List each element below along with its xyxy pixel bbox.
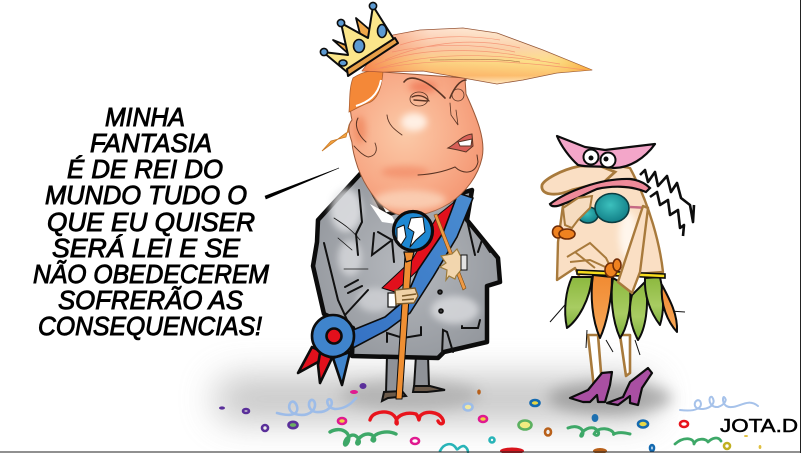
royal sash [353, 193, 473, 348]
speech line [265, 168, 339, 199]
crown [320, 2, 398, 76]
body [557, 165, 663, 280]
big nose [542, 166, 615, 194]
confetti: green streamer right [675, 438, 721, 444]
signature: JOTA.D [720, 416, 798, 436]
speech text: FANTASIA [90, 128, 212, 158]
confetti: small rings [243, 400, 730, 451]
scepter with globe [394, 212, 432, 399]
confetti: small dots [219, 383, 761, 453]
confetti [219, 383, 761, 453]
hand holding scepter [388, 288, 418, 307]
confetti: teal streamer bottom [440, 444, 468, 452]
orange bracelet waist [605, 259, 621, 277]
speech text: É DE REI DO [67, 154, 223, 184]
swept hair [362, 28, 592, 84]
pink hat [557, 136, 655, 168]
turquoise bikini [578, 194, 649, 223]
shirt collar [370, 204, 396, 224]
mouth [550, 179, 650, 206]
facial lines [354, 78, 478, 175]
speech text: SERÁ LEI E SE [52, 233, 241, 263]
purple heels [570, 368, 652, 405]
side hair [349, 71, 383, 112]
yellow waist band [577, 270, 665, 278]
carnival woman figure [542, 136, 694, 405]
suit creases [324, 190, 490, 355]
second wand [434, 214, 466, 290]
speech text [33, 102, 269, 341]
confetti: green streamer left [330, 430, 396, 445]
confetti: blue streamer right [680, 397, 758, 411]
mouth [448, 134, 473, 152]
speech text: CONSEQUENCIAS! [38, 311, 262, 341]
raised hand [563, 196, 592, 228]
confetti: blue streamer left [277, 398, 356, 415]
confetti: green streamer middle [568, 427, 630, 436]
head [349, 71, 483, 216]
speech text: MUNDO TUDO O [45, 180, 247, 210]
confetti: red streamer [370, 412, 443, 424]
legs [588, 335, 630, 388]
gray suit [313, 172, 500, 358]
floor shadow [215, 378, 672, 420]
speech text: SOFRERÃO AS [58, 285, 244, 315]
right hand [440, 249, 463, 280]
speech text: QUE EU QUISER [47, 207, 255, 237]
speech text: NÃO OBEDECEREM [33, 259, 269, 289]
king figure [298, 2, 592, 401]
black wavy hair [640, 170, 694, 236]
orange bracelet raised [552, 226, 575, 239]
legs [382, 355, 445, 401]
side hair tuft [322, 125, 354, 151]
leaf skirt [550, 275, 685, 355]
rosette [298, 315, 354, 385]
arm over band [618, 206, 648, 293]
speech text: MINHA [105, 102, 185, 132]
